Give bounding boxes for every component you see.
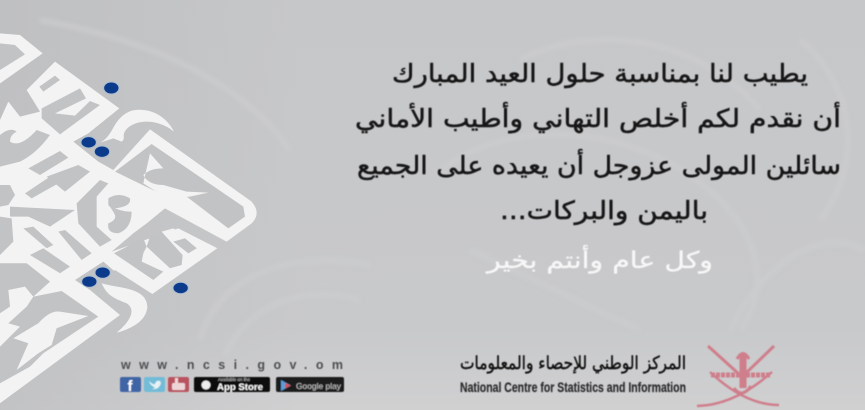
calligraphy: notch behind lower dots (75, 262, 115, 290)
social and store badges (120, 377, 344, 395)
khanjar dagger (740, 355, 746, 388)
dots (81, 82, 188, 294)
badge: Google play (276, 377, 344, 392)
english name: National Centre for Statistics and Information (460, 379, 686, 395)
line 4: باليمن والبركات... (500, 196, 708, 226)
icon: facebook (120, 377, 141, 395)
calligraphy: top-left corner shape (0, 33, 43, 83)
icon: oman national emblem (697, 346, 779, 406)
badge: App Store: App Store (217, 382, 263, 393)
line 1: يطيب لنا بمناسبة حلول العيد المبارك (392, 59, 808, 88)
calligraphy: frame inner glyph (143, 153, 208, 198)
calligraphy: slot in lower box (162, 228, 197, 255)
website url: www.ncsi.gov.om (120, 358, 343, 372)
calligraphy: lower cell glyph (13, 311, 88, 370)
arabic name: المركز الوطني للإحصاء والمعلومات (460, 353, 686, 374)
icon: youtube (168, 377, 189, 392)
closing wish: وكل عام وأنتم بخير (486, 245, 713, 274)
calligraphy: crescent top (100, 110, 174, 143)
badge: App Store: Available on the (218, 377, 250, 382)
icon: twitter (144, 377, 165, 392)
calligraphy: frame interior (115, 144, 245, 228)
icon: facebook: f (128, 378, 134, 395)
greeting text (355, 59, 841, 226)
calligraphy: grey cut-outs (0, 76, 245, 383)
belt (711, 372, 771, 378)
calligraphy: clover lobes (108, 195, 132, 233)
line 3: سائلين المولى عزوجل أن يعيده على الجميع (357, 148, 841, 181)
badge: App Store (194, 377, 270, 393)
organisation name (460, 353, 686, 395)
calligraphy emblem (0, 33, 257, 403)
calligraphy: crescent bottom (102, 283, 147, 333)
crossed swords (708, 346, 774, 375)
calligraphy: lower box cells (114, 238, 163, 280)
calligraphy: white lattice silhouette (0, 62, 257, 403)
line 2: أن نقدم لكم أخلص التهاني وأطيب الأماني (355, 101, 841, 134)
badge: Google play: Google play (296, 381, 342, 391)
